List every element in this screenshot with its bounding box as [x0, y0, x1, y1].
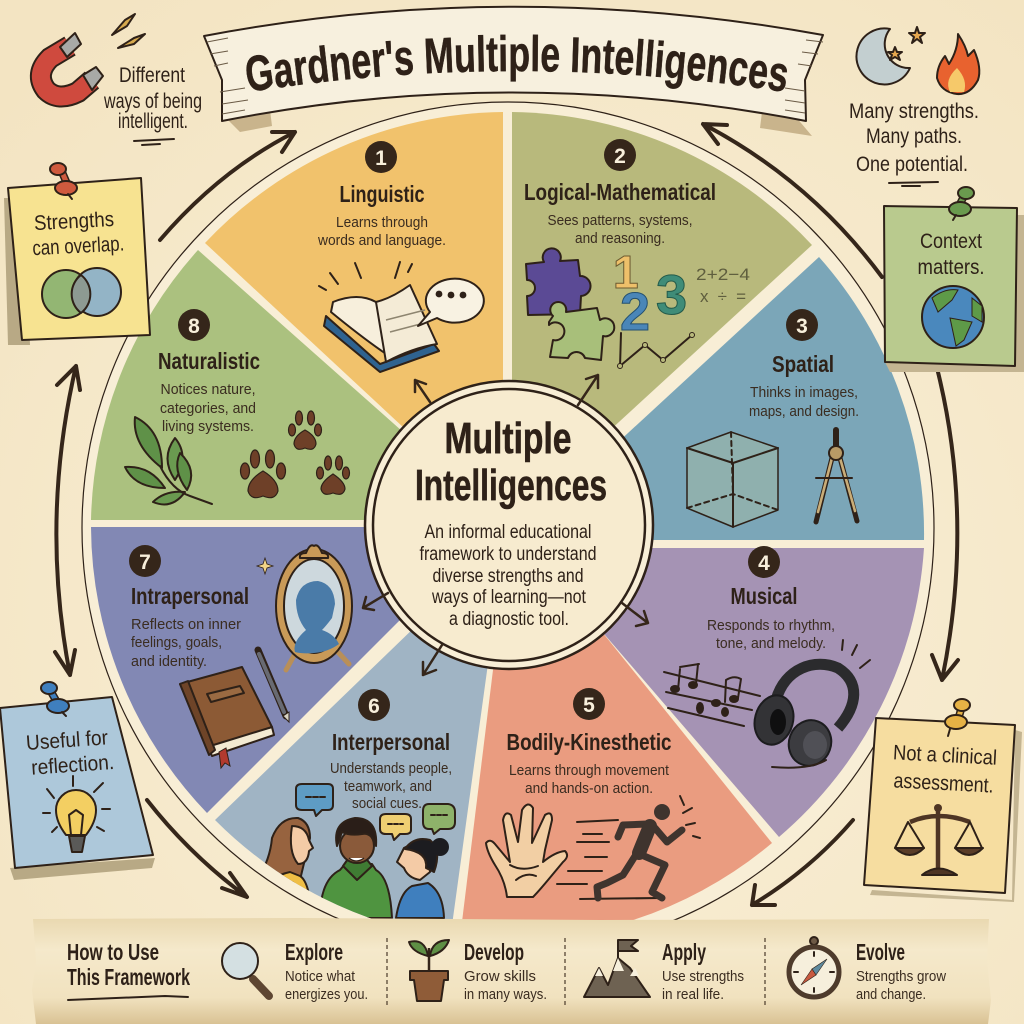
step: Develop: Grow skills: [464, 968, 536, 985]
note text: assessment.: [893, 769, 994, 798]
strip heading: This Framework: [67, 964, 190, 990]
icon: wireframe cube: [687, 432, 778, 527]
panel: 1 Linguistic: Linguistic: [340, 181, 425, 207]
panel: 6 Interpersonal: teamwork, and: [344, 778, 432, 795]
icon: flag on mountains: [584, 940, 650, 997]
note text: [891, 741, 998, 798]
panel: 7 Intrapersonal: Reflects on inner: [131, 616, 241, 633]
icon: horseshoe magnet: [41, 33, 103, 97]
step: Evolve: Strengths grow: [856, 968, 946, 985]
step: Explore: Notice what: [285, 968, 356, 985]
panel: 2 Logical-Mathematical: Sees patterns, systems,: [548, 212, 692, 229]
panel: 7 Intrapersonal: Intrapersonal: [131, 583, 249, 609]
step: Explore: energizes you.: [285, 986, 368, 1003]
note text: matters.: [918, 256, 984, 279]
arrows: surrounding cycle: [55, 124, 958, 905]
note text: [25, 726, 115, 780]
panel: 7 Intrapersonal: feelings, goals,: [131, 634, 222, 651]
panel: 5 Bodily-Kinesthetic: Learns through movement: [509, 762, 670, 779]
panel: 6 Interpersonal: Interpersonal: [332, 729, 450, 755]
panel: 3 Spatial: Spatial: [772, 351, 834, 377]
icon: headphones: [749, 640, 870, 772]
icon: red pushpin: [50, 163, 77, 199]
icon: numbers 1 2 3 and formula: 2: [620, 282, 650, 342]
step: Explore: Explore: [285, 939, 343, 965]
hub heading: Multiple: [444, 414, 572, 463]
note text: [30, 207, 125, 260]
icon: open book with speech bubble: [319, 262, 484, 372]
strip heading: How to Use: [67, 939, 159, 965]
icon: numbers 1 2 3 and formula: 1: [613, 246, 639, 298]
panel: 1 Linguistic: 1: [375, 147, 387, 170]
sticky note: context matters: [884, 187, 1024, 372]
panel: 5 Bodily-Kinesthetic: Bodily-Kinesthetic: [506, 729, 672, 755]
step: Evolve: [789, 937, 946, 1003]
panel: 4 Musical: tone, and melody.: [716, 635, 826, 652]
icon: leather journal and pen: [180, 650, 289, 768]
icon: magnifying glass: [222, 943, 269, 996]
panel: 8 Naturalistic: categories, and: [160, 400, 256, 417]
panel: 8 Naturalistic: Notices nature,: [160, 381, 256, 398]
step: Develop: Develop: [464, 939, 524, 965]
side note: many strengths: Many paths.: [866, 125, 962, 148]
sticky note: useful for reflection: [0, 682, 155, 880]
panel: 8 Naturalistic: [91, 250, 500, 520]
bottom strip: how to use this framework: [32, 918, 991, 1024]
icon: numbers 1 2 3 and formula: x ÷ =: [700, 287, 746, 306]
panel: 2 Logical-Mathematical: Logical-Mathematical: [524, 179, 716, 205]
icon: line graph: [618, 332, 694, 368]
side note: different ways: ways of being: [103, 90, 202, 113]
hub heading: [415, 414, 607, 510]
panel: 5 Bodily-Kinesthetic: 5: [583, 694, 595, 717]
note text: [918, 230, 984, 279]
icon: runner with motion lines: [557, 796, 700, 899]
icon: three people talking: [258, 818, 449, 920]
panel: 5 Bodily-Kinesthetic: and hands-on action.: [525, 780, 653, 797]
side note: different ways: Different: [119, 64, 185, 87]
hub heading: Intelligences: [415, 461, 607, 510]
hub description: [420, 522, 596, 630]
icon: balance scales: [895, 804, 983, 875]
side note: different ways: [103, 64, 202, 145]
note text: Not a clinical: [892, 741, 998, 770]
step: Develop: [409, 939, 547, 1003]
icon: oval mirror with silhouette: [257, 545, 352, 670]
side note: different ways: intelligent.: [118, 110, 188, 133]
step: Apply: [584, 939, 744, 1003]
panel: 2 Logical-Mathematical: 2: [614, 145, 626, 168]
title banner: [203, 6, 824, 136]
panel: 5 Bodily-Kinesthetic: [460, 530, 772, 940]
hub description: ways of learning—not: [431, 587, 587, 608]
step: Apply: Apply: [662, 939, 706, 965]
icon: numbers 1 2 3 and formula: [613, 246, 750, 342]
step: Explore: [222, 939, 368, 1003]
icon: speech bubbles: [296, 784, 455, 840]
step: Evolve: Evolve: [856, 939, 905, 965]
step: Develop: in many ways.: [464, 986, 547, 1003]
panel: 6 Interpersonal: [215, 632, 488, 919]
icon: yellow pushpin: [945, 699, 970, 736]
panel: 1 Linguistic: words and language.: [317, 232, 446, 249]
panel: 3 Spatial: 3: [796, 315, 808, 338]
side note: many strengths: One potential.: [856, 153, 968, 176]
icon: crescent moon and stars: [856, 27, 925, 84]
hub description: framework to understand: [420, 544, 596, 565]
icon: drawing compass: [816, 430, 857, 522]
panel: 7 Intrapersonal: 7: [139, 551, 151, 574]
panel: 4 Musical: Musical: [730, 583, 798, 609]
hub description: diverse strengths and: [432, 566, 584, 587]
step: Evolve: and change.: [856, 986, 926, 1003]
panel: 1 Linguistic: Learns through: [336, 214, 428, 231]
panel: 7 Intrapersonal: [91, 527, 500, 813]
sticky note: strengths can overlap: [4, 163, 150, 345]
side note: many strengths: Many strengths.: [849, 100, 979, 123]
sticky note: not a clinical assessment: [864, 699, 1022, 902]
panel: 8 Naturalistic: Naturalistic: [158, 348, 260, 374]
icon: open hand: [486, 804, 567, 897]
arrows: pointers from hub to wedges: [363, 375, 648, 675]
step: Apply: in real life.: [662, 986, 724, 1003]
strip heading: [67, 939, 190, 1000]
icon: blue pushpin: [41, 682, 69, 716]
icon: numbers 1 2 3 and formula: 3: [656, 263, 687, 326]
panel: 3 Spatial: [525, 257, 924, 540]
icon: globe: [922, 286, 984, 348]
icon: flame: [937, 34, 979, 94]
panel: 3 Spatial: Thinks in images,: [750, 384, 858, 401]
panel: 4 Musical: Responds to rhythm,: [707, 617, 835, 634]
icon: potted seedling: [409, 940, 449, 1001]
center hub: [365, 381, 653, 669]
panel: 8 Naturalistic: 8: [188, 315, 200, 338]
icon: green pushpin: [949, 187, 974, 220]
icon: spark marks: [112, 14, 145, 48]
panel: 4 Musical: 4: [758, 552, 770, 575]
icon: pocket compass: [789, 937, 839, 997]
side note: many strengths: [849, 100, 979, 186]
note text: can overlap.: [32, 232, 125, 260]
note text: Strengths: [33, 208, 115, 235]
panel: 3 Spatial: maps, and design.: [749, 403, 859, 420]
panel: 6 Interpersonal: 6: [368, 695, 380, 718]
note text: Useful for: [25, 726, 109, 755]
panel: 4 Musical: [530, 546, 924, 837]
icon: numbers 1 2 3 and formula: 2+2−4: [696, 265, 750, 284]
panel: 6 Interpersonal: Understands people,: [330, 760, 452, 777]
icon: puzzle pieces: [526, 248, 614, 360]
hub description: a diagnostic tool.: [449, 609, 569, 630]
icon: green leaves on a branch: [125, 417, 212, 504]
note text: Context: [920, 230, 982, 253]
note text: reflection.: [31, 751, 115, 780]
panel: 2 Logical-Mathematical: and reasoning.: [575, 230, 665, 247]
icon: animal paw prints: [240, 411, 350, 498]
panel: 8 Naturalistic: living systems.: [162, 418, 254, 435]
panel: 7 Intrapersonal: and identity.: [131, 653, 207, 670]
title text: Gardner's Multiple Intelligences: [246, 34, 788, 92]
wheel backing ring: [82, 102, 934, 954]
icon: venn diagram: [42, 268, 121, 318]
icon: music notes: [664, 664, 760, 726]
step: Apply: Use strengths: [662, 968, 744, 985]
icon: light bulb: [43, 776, 110, 852]
panel: 6 Interpersonal: social cues.: [352, 795, 422, 812]
panel: 1 Linguistic: [205, 112, 503, 520]
panel: 2 Logical-Mathematical: [512, 112, 812, 520]
hub description: An informal educational: [424, 522, 592, 543]
